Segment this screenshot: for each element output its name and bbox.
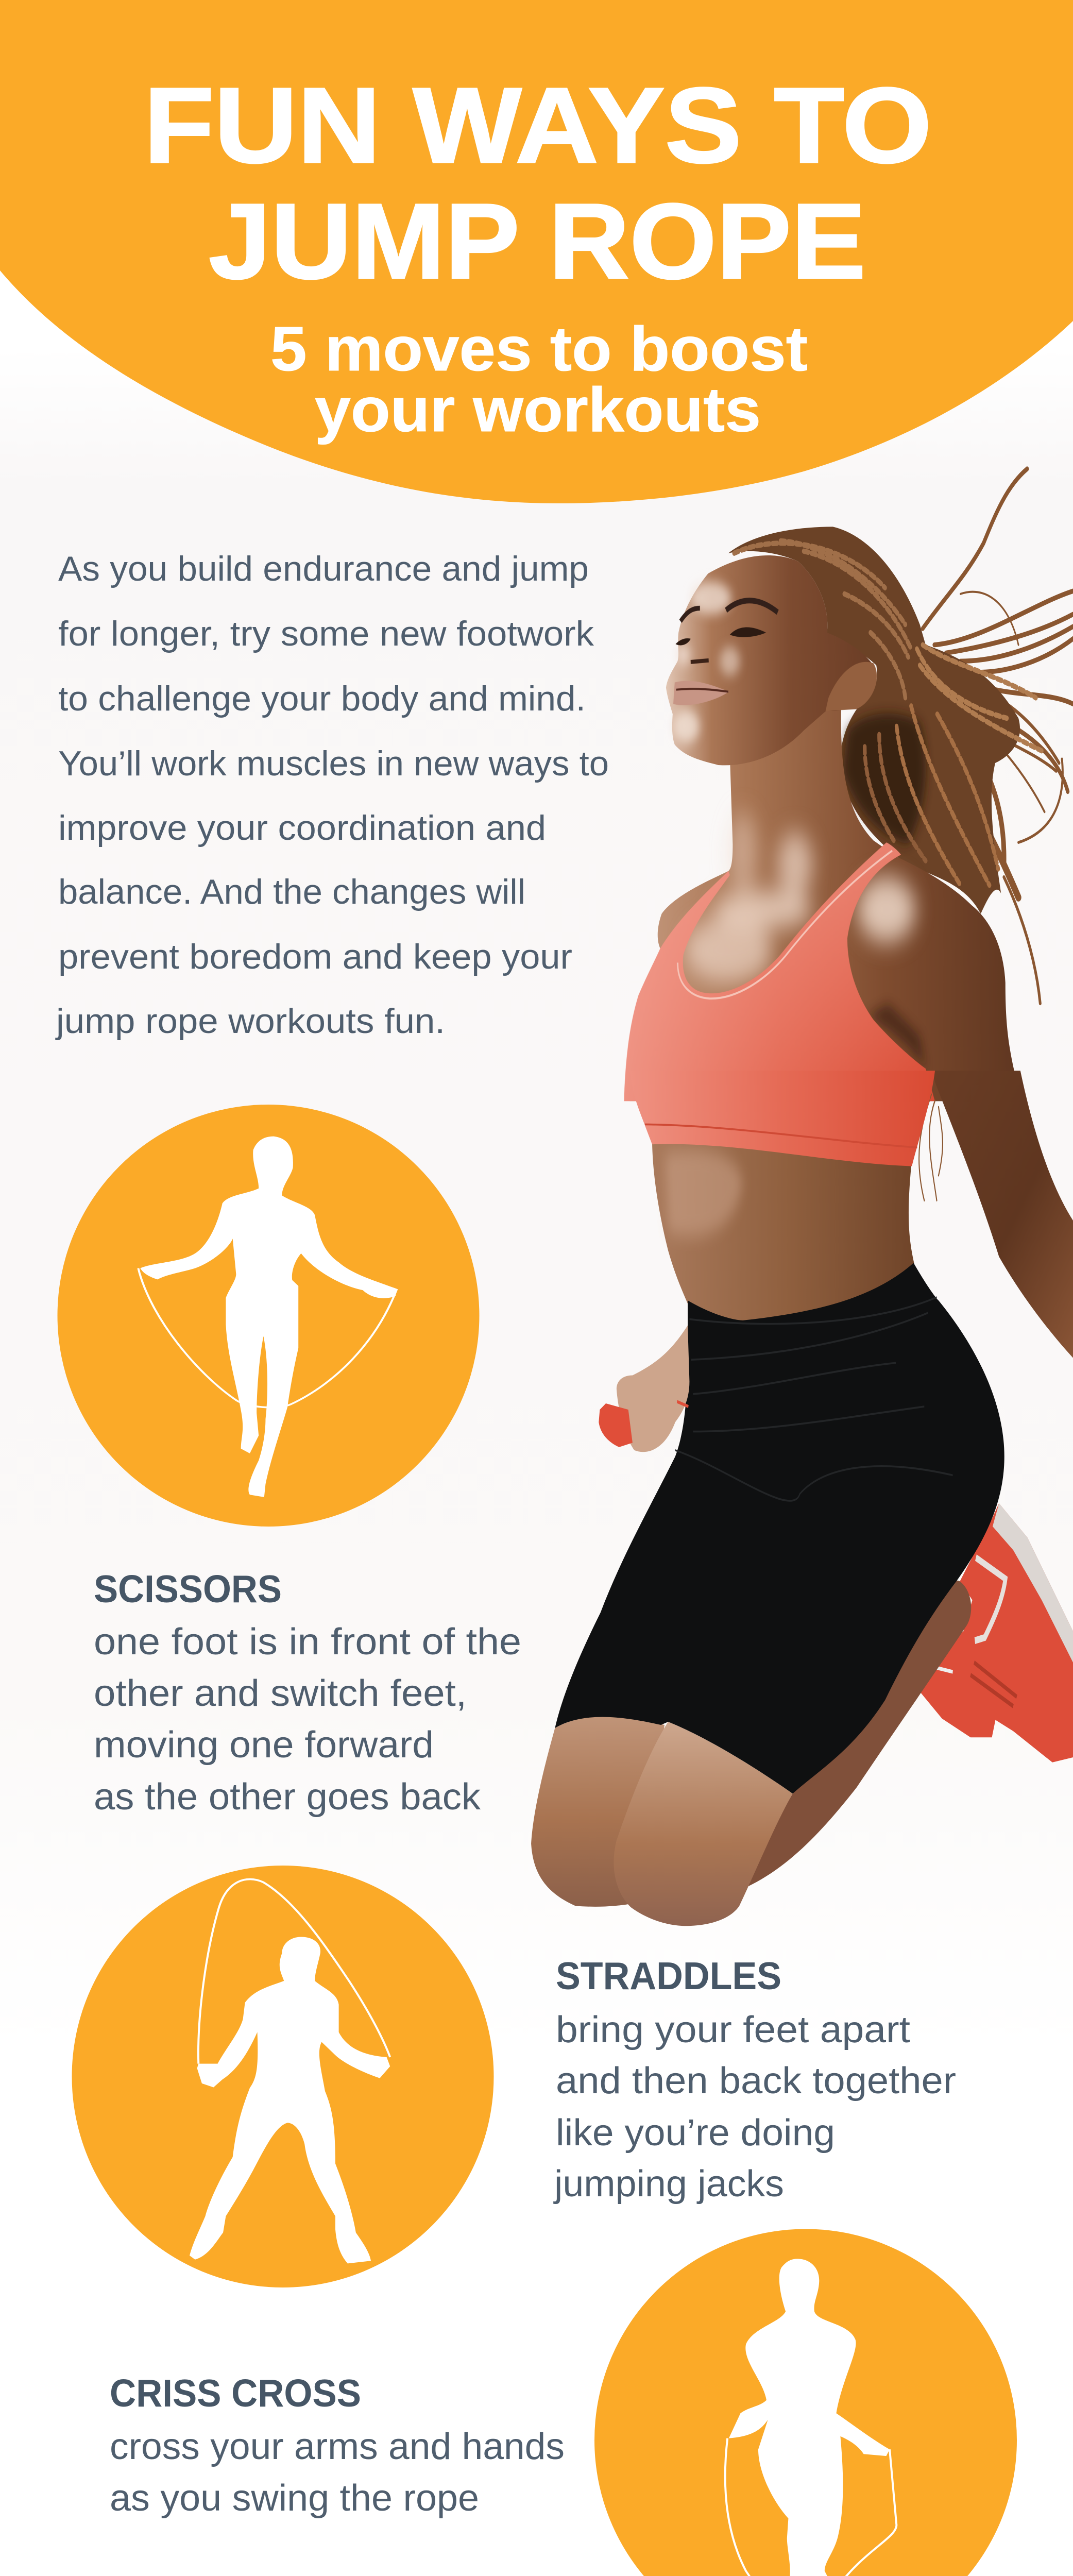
straddles text: and then back together — [556, 2060, 956, 2102]
skin highlights — [685, 812, 915, 983]
straddles text: like you’re doing — [556, 2112, 835, 2154]
intro text: You’ll work muscles in new ways to — [58, 744, 609, 783]
scissors text: as the other goes back — [94, 1776, 481, 1818]
intro text: for longer, try some new footwork — [58, 614, 594, 653]
criss cross text: as you swing the rope — [110, 2478, 479, 2519]
flying braids — [923, 469, 1073, 1004]
photo: jumping woman — [531, 469, 1073, 1926]
dark hair underside — [843, 714, 926, 844]
photo upper body: head, hair and bra top — [624, 469, 1073, 1101]
bra top — [624, 842, 935, 1101]
left hand with handle — [599, 1326, 689, 1452]
underarm shadow — [867, 1004, 926, 1069]
left knee — [531, 1717, 665, 1907]
scalp braids texture — [734, 541, 1042, 885]
straddles text: jumping jacks — [553, 2163, 784, 2205]
scissors text: one foot is in front of the — [94, 1621, 521, 1663]
intro text: improve your coordination and — [58, 808, 546, 848]
scissors silhouette — [138, 1137, 397, 1497]
bra band — [629, 1071, 935, 1166]
title — [144, 66, 932, 301]
straddles text: bring your feet apart — [556, 2009, 910, 2050]
criss cross circle icon — [594, 2229, 1017, 2576]
intro text: balance. And the changes will — [58, 872, 525, 911]
rear calf — [746, 1581, 971, 1887]
lips — [673, 681, 729, 705]
photo lower body: arm, abs, shorts, legs, shoes — [531, 1071, 1073, 1926]
bra top light wash — [624, 842, 935, 1101]
scissors text: moving one forward — [94, 1724, 434, 1766]
neckline trim — [677, 851, 892, 998]
intro text: jump rope workouts fun. — [55, 1002, 445, 1041]
scissors circle icon — [58, 1105, 479, 1527]
straddles text — [553, 1954, 956, 2205]
intro text — [55, 549, 609, 1041]
straddles circle icon — [72, 1866, 493, 2287]
straddles text: STRADDLES — [556, 1954, 781, 1997]
right knee — [614, 1722, 793, 1926]
abdomen — [652, 1138, 917, 1344]
criss cross text: CRISS CROSS — [110, 2371, 361, 2415]
face — [666, 555, 874, 765]
header banner — [0, 0, 1073, 503]
intro text: to challenge your body and mind. — [58, 679, 586, 718]
straddles silhouette — [190, 1879, 390, 2263]
abdomen highlight — [665, 1150, 743, 1236]
scissors text: other and switch feet, — [94, 1673, 467, 1714]
ear — [826, 662, 877, 711]
intro text: As you build endurance and jump — [58, 549, 589, 588]
title: JUMP ROPE — [209, 182, 866, 301]
subtitle: 5 moves to boost — [270, 314, 808, 384]
scissors text — [94, 1567, 521, 1818]
subtitle — [270, 314, 808, 445]
stray hair strands — [919, 1094, 943, 1200]
criss cross text — [110, 2371, 565, 2519]
eyes and brows — [675, 601, 778, 662]
shoes — [919, 1503, 1073, 1762]
intro text: prevent boredom and keep your — [58, 937, 572, 976]
scissors text: SCISSORS — [94, 1567, 282, 1611]
hair mass — [728, 527, 1020, 914]
neck, chest and shoulders skin — [630, 698, 1022, 1101]
orange arc — [0, 0, 1073, 503]
face highlights — [673, 582, 740, 742]
shorts folds — [675, 1297, 953, 1501]
title: FUN WAYS TO — [144, 66, 932, 185]
right arm — [932, 1071, 1073, 1358]
subtitle: your workouts — [315, 375, 761, 445]
shorts — [555, 1263, 1004, 1793]
criss cross silhouette — [725, 2259, 896, 2576]
criss cross text: cross your arms and hands — [110, 2426, 565, 2467]
